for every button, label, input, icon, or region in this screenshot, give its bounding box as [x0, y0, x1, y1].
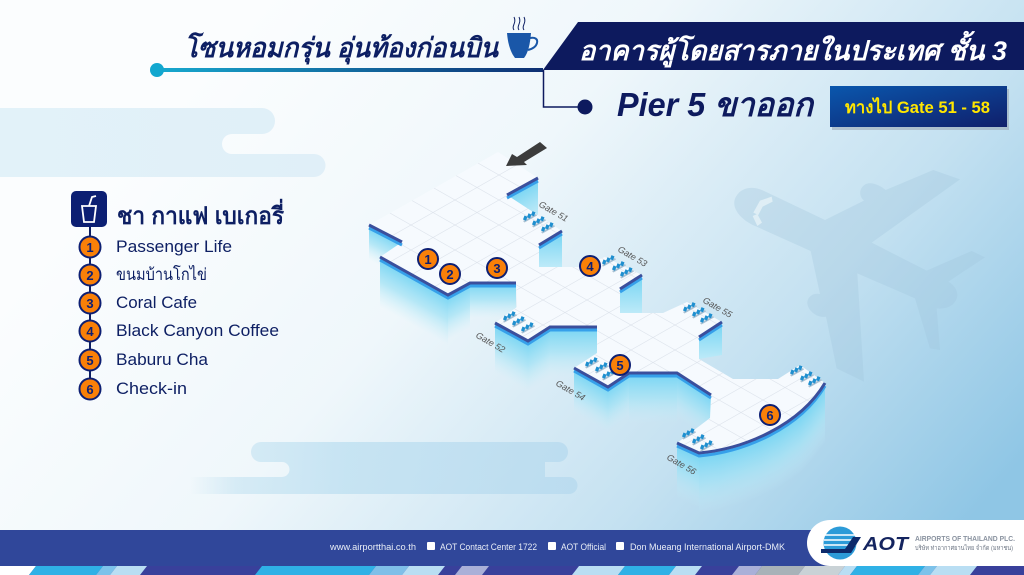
badge: gate direction: ทางไป Gate 51 - 58 — [845, 97, 990, 117]
legend item 6: Check-in — [116, 380, 187, 398]
map marker 4: 4 — [586, 259, 594, 274]
gate labels: Gate 54 — [554, 378, 587, 403]
legend item 6: 6 — [86, 382, 94, 397]
legend item 6 — [80, 378, 187, 400]
heading: pier: Pier 5 ขาออก — [617, 86, 815, 123]
legend item 2 — [80, 264, 207, 286]
legend connector — [89, 225, 91, 385]
legend item 3 — [80, 292, 197, 314]
map marker 6 — [760, 405, 780, 425]
footer stripes — [0, 566, 1024, 575]
logo: AOT — [821, 526, 1015, 560]
rule line with dot — [150, 63, 543, 77]
connector to pier label — [544, 70, 592, 114]
banner: terminal and floor — [543, 22, 1024, 70]
footer — [0, 520, 1024, 575]
legend — [71, 191, 284, 400]
gate labels — [474, 199, 735, 477]
icon: takeaway drink — [71, 191, 107, 227]
map marker 3 — [487, 258, 507, 278]
legend item 2: ขนมบ้านโกไข่ — [116, 265, 207, 284]
legend item 5 — [80, 350, 209, 370]
logo: AOT: AIRPORTS OF THAILAND PLC. — [915, 536, 1015, 543]
legend item 3: 3 — [86, 296, 94, 311]
map marker 5: 5 — [616, 358, 624, 373]
legend item 5: Baburu Cha — [116, 351, 209, 369]
gate labels: Gate 51 — [537, 199, 570, 224]
footer contact line: AOT Official — [561, 542, 606, 552]
cloud: lower centre — [190, 442, 578, 494]
gate labels: Gate 53 — [616, 244, 649, 269]
map marker 2: 2 — [446, 267, 454, 282]
airplane silhouette — [734, 170, 985, 382]
floor edges — [369, 178, 825, 456]
icon: coffee cup — [507, 17, 537, 58]
legend item 5: 5 — [86, 353, 94, 368]
footer contact line: Don Mueang International Airport-DMK — [630, 542, 785, 552]
legend item 3: Coral Cafe — [116, 294, 197, 312]
map marker 5 — [610, 355, 630, 375]
floor plan map — [369, 142, 825, 513]
banner: terminal and floor: อาคารผู้โดยสารภายในประเทศ ชั้น 3 — [579, 30, 1007, 68]
heading: food zone title: โซนหอมกรุ่น อุ่นท้องก่อนบิน — [184, 31, 499, 65]
map marker 1: 1 — [424, 252, 432, 267]
walls — [369, 178, 825, 513]
legend item 4: Black Canyon Coffee — [116, 322, 279, 340]
logo: AOT: AOT — [862, 534, 910, 554]
footer bar — [0, 530, 1024, 566]
legend item 1 — [80, 236, 232, 258]
footer contact line — [329, 542, 785, 552]
legend item 1: 1 — [86, 240, 94, 255]
gate seats — [503, 211, 822, 452]
footer contact line: AOT Contact Center 1722 — [440, 542, 537, 552]
entrance arrow — [506, 142, 547, 166]
legend item 1: Passenger Life — [116, 238, 232, 256]
legend item 2: 2 — [86, 268, 94, 283]
gate labels: Gate 56 — [665, 452, 698, 477]
map marker 4 — [580, 256, 600, 276]
gate labels: Gate 55 — [701, 295, 735, 320]
cloud: upper left — [0, 108, 326, 177]
legend item 4 — [80, 320, 279, 342]
map marker 2 — [440, 264, 460, 284]
badge: gate direction — [830, 86, 1009, 130]
floor — [369, 152, 825, 453]
gate labels: Gate 52 — [474, 330, 507, 355]
map marker 1 — [418, 249, 438, 269]
map marker 3: 3 — [493, 261, 501, 276]
legend heading: ชา กาแฟ เบเกอรี่ — [117, 198, 284, 230]
legend item 4: 4 — [86, 324, 94, 339]
map marker 6: 6 — [766, 408, 774, 423]
header — [150, 17, 1024, 130]
footer contact line: www.airportthai.co.th — [329, 542, 416, 552]
logo plate — [807, 520, 1024, 566]
